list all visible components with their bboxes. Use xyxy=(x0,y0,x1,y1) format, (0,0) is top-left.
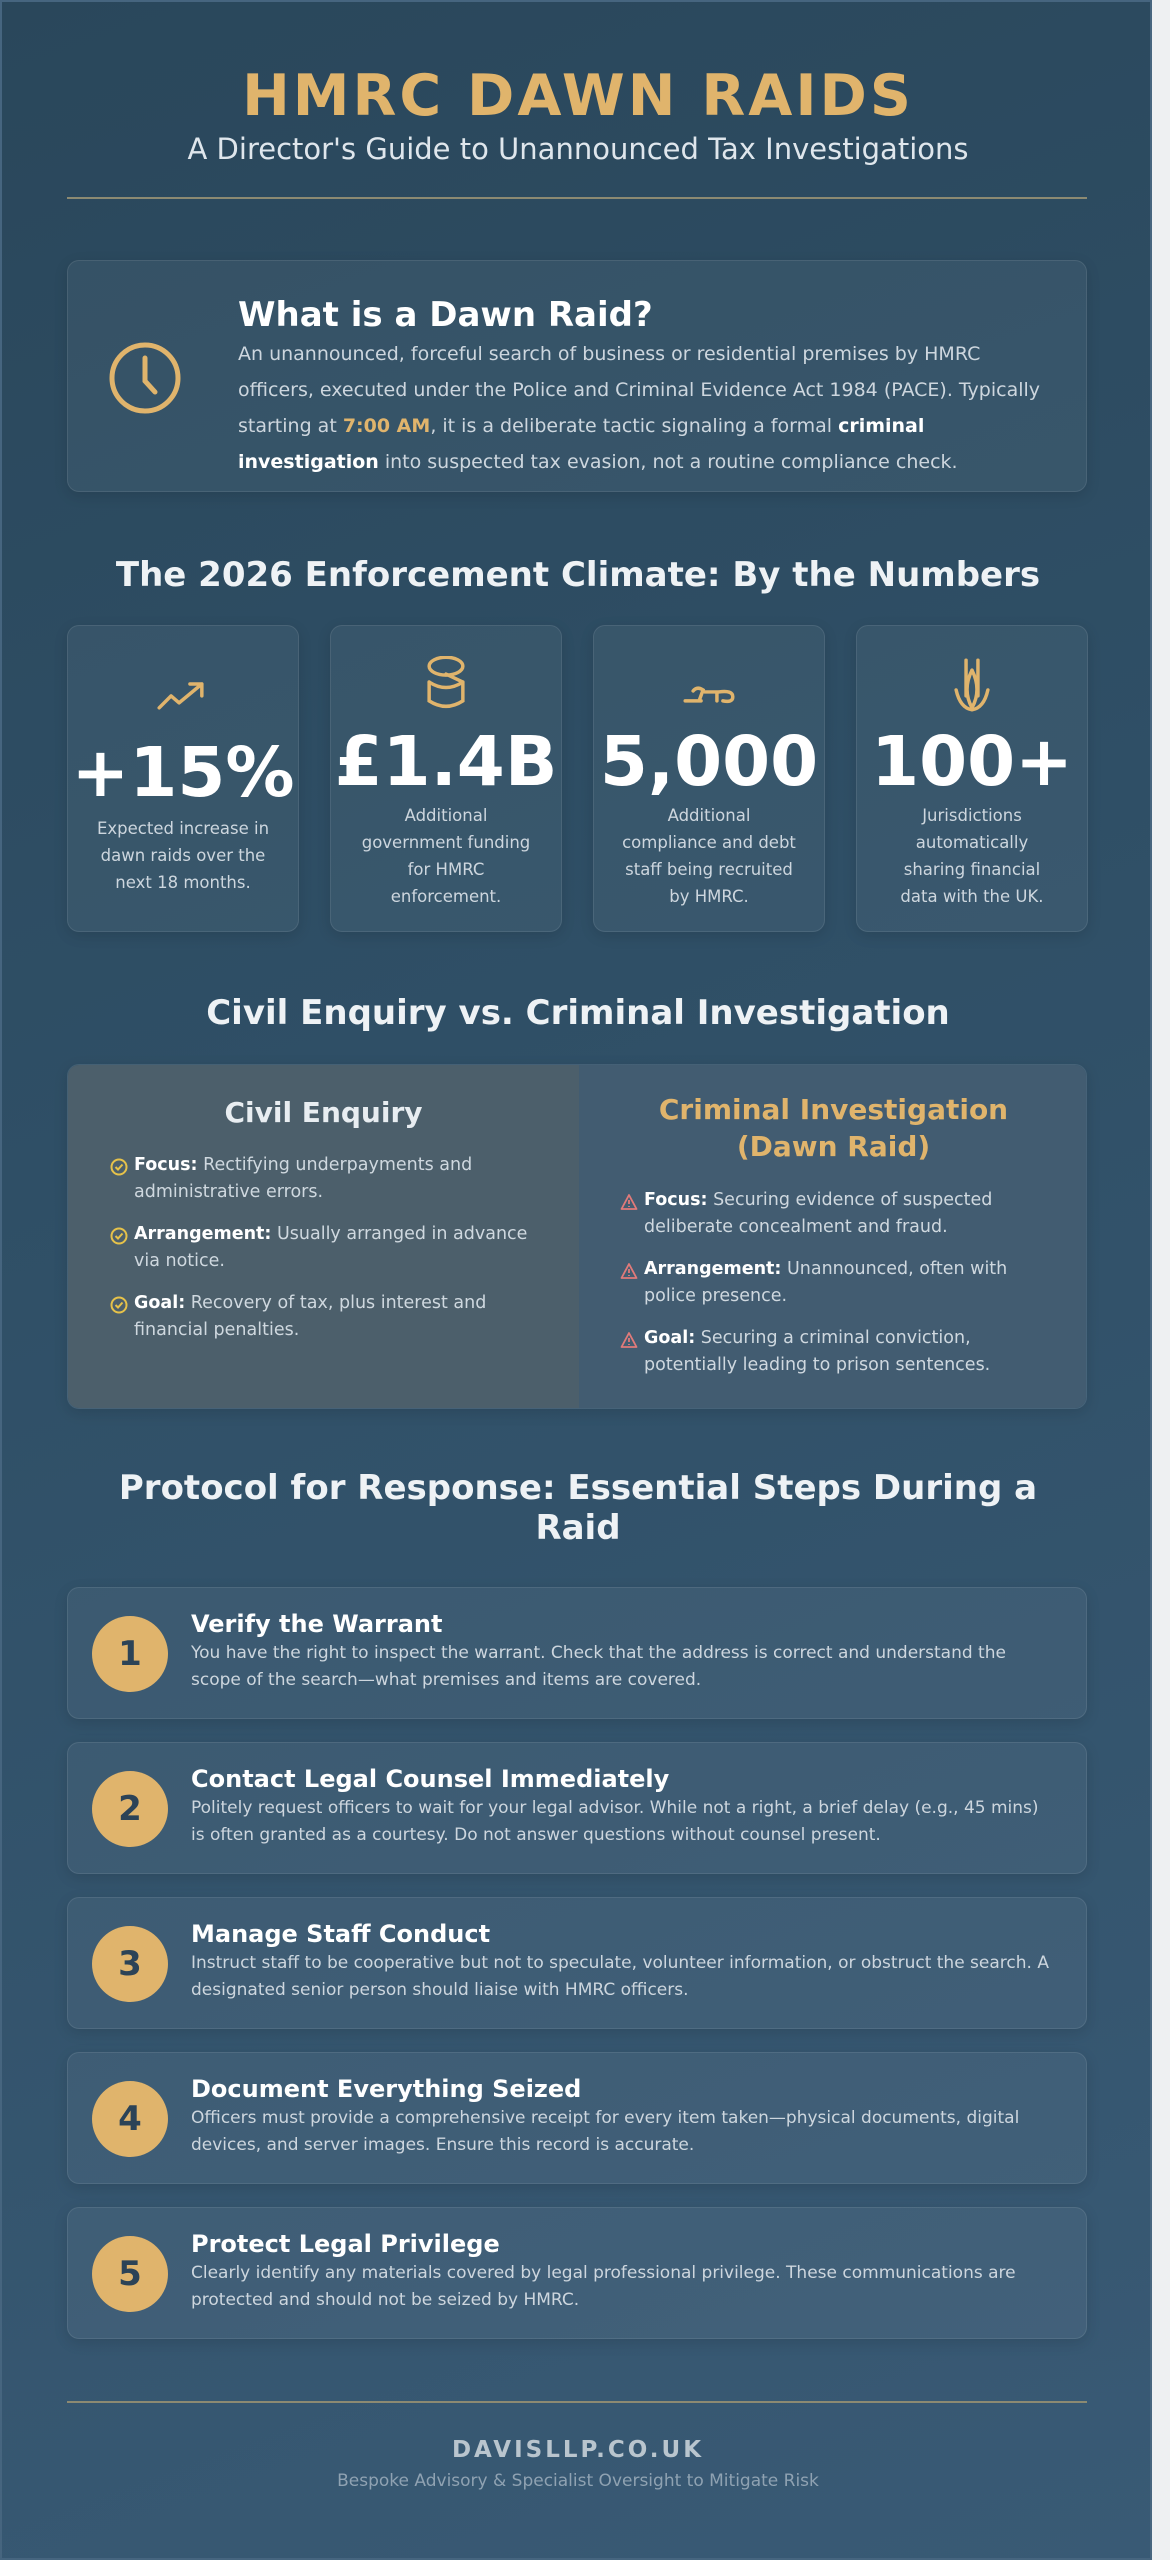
stat: £1.4B xyxy=(330,625,562,932)
heading: civil vs criminal: Civil Enquiry vs. Criminal Investigation xyxy=(206,993,950,1033)
title: HMRC DAWN RAIDS xyxy=(242,63,914,129)
panel: comparison xyxy=(67,1064,1087,1409)
panel: civil enquiry xyxy=(68,1065,579,1410)
footer: site: DAVISLLP.CO.UK xyxy=(452,2437,704,2463)
step 4: 4 xyxy=(118,2099,142,2139)
icon: clock xyxy=(110,342,180,414)
heading: protocol: Protocol for Response: Essential Steps During a Raid xyxy=(119,1468,1037,1548)
stat: +15% xyxy=(67,625,299,932)
civil title: Civil Enquiry xyxy=(224,1096,423,1129)
icon: coins xyxy=(427,656,465,708)
panel: what is a dawn raid xyxy=(67,260,1087,492)
stat: +15%: Expected increase in dawn raids over the next 18 months. xyxy=(97,819,269,892)
criminal title: Criminal Investigation xyxy=(659,1093,1008,1126)
item: arrangement: Arrangement: Unannounced, often with police presence. xyxy=(644,1259,1007,1306)
step 3 xyxy=(67,1897,1087,2029)
icon: trend xyxy=(157,682,204,710)
icon: people xyxy=(684,686,734,704)
step 3: Instruct staff to be cooperative but not to speculate, volunteer information, or obstruct the search. A designated senior person should liaise with HMRC officers. xyxy=(191,1953,1049,2000)
heading: numbers: The 2026 Enforcement Climate: By the Numbers xyxy=(116,555,1040,595)
stat: 100+: Jurisdictions automatically sharing financial data with the UK. xyxy=(900,806,1044,906)
step 4: Document Everything Seized xyxy=(191,2075,581,2103)
step 1: Verify the Warrant xyxy=(191,1610,442,1638)
icon: globe xyxy=(954,658,990,712)
step 5 xyxy=(67,2207,1087,2339)
step 2: 2 xyxy=(118,1789,142,1829)
step 2 xyxy=(67,1742,1087,1874)
step 5: Protect Legal Privilege xyxy=(191,2230,500,2258)
step 2: Politely request officers to wait for your legal advisor. While not a right, a brief delay (e.g., 45 mins) is often granted as a courtesy. Do not answer questions without counsel present. xyxy=(191,1798,1039,1845)
stat: 5,000 xyxy=(593,625,825,932)
body text: An unannounced, forceful search of business or residential premises by HMRC officers, executed under the Police and Criminal Evidence Act 1984 (PACE). Typically starting at 7:00 AM, it is a deliberate tactic signaling a formal criminal investigation into suspected tax evasion, not a routine compliance check. xyxy=(238,343,1040,473)
stat: £1.4B: £1.4B xyxy=(335,722,557,802)
step 4: Officers must provide a comprehensive receipt for every item taken—physical documents, digital devices, and server images. Ensure this record is accurate. xyxy=(191,2108,1019,2155)
item: arrangement: Arrangement: Usually arranged in advance via notice. xyxy=(134,1224,527,1271)
criminal title xyxy=(659,1093,1008,1163)
step 4 xyxy=(67,2052,1087,2184)
stat: 100+ xyxy=(856,625,1088,932)
stat: 5,000: 5,000 xyxy=(600,722,818,802)
item: goal: Goal: Securing a criminal conviction, potentially leading to prison sentences. xyxy=(644,1328,990,1375)
step 5: 5 xyxy=(118,2254,142,2294)
step 3: 3 xyxy=(118,1944,142,1984)
step 1: You have the right to inspect the warrant. Check that the address is correct and understand the scope of the search—what premises and items are covered. xyxy=(191,1643,1006,1690)
step 3: Manage Staff Conduct xyxy=(191,1920,490,1948)
panel: criminal investigation xyxy=(579,1065,1088,1410)
item: focus: Focus: Securing evidence of suspected deliberate concealment and fraud. xyxy=(644,1190,992,1237)
stat: 100+: 100+ xyxy=(871,722,1073,802)
subtitle: A Director's Guide to Unannounced Tax Investigations xyxy=(188,132,968,166)
stat: +15%: +15% xyxy=(72,733,294,813)
item: goal: Goal: Recovery of tax, plus interest and financial penalties. xyxy=(134,1293,486,1340)
stat: £1.4B: Additional government funding for HMRC enforcement. xyxy=(362,806,530,906)
step 1 xyxy=(67,1587,1087,1719)
step 2: Contact Legal Counsel Immediately xyxy=(191,1765,669,1793)
item: focus: Focus: Rectifying underpayments and administrative errors. xyxy=(134,1155,472,1202)
criminal title: (Dawn Raid) xyxy=(737,1130,930,1163)
step 1: 1 xyxy=(118,1634,142,1674)
footer: tagline: Bespoke Advisory & Specialist Oversight to Mitigate Risk xyxy=(337,2471,819,2491)
step 5: Clearly identify any materials covered by legal professional privilege. These communications are protected and should not be seized by HMRC. xyxy=(191,2263,1016,2310)
stat: 5,000: Additional compliance and debt staff being recruited by HMRC. xyxy=(622,806,796,906)
heading: What is a Dawn Raid? xyxy=(238,295,653,335)
